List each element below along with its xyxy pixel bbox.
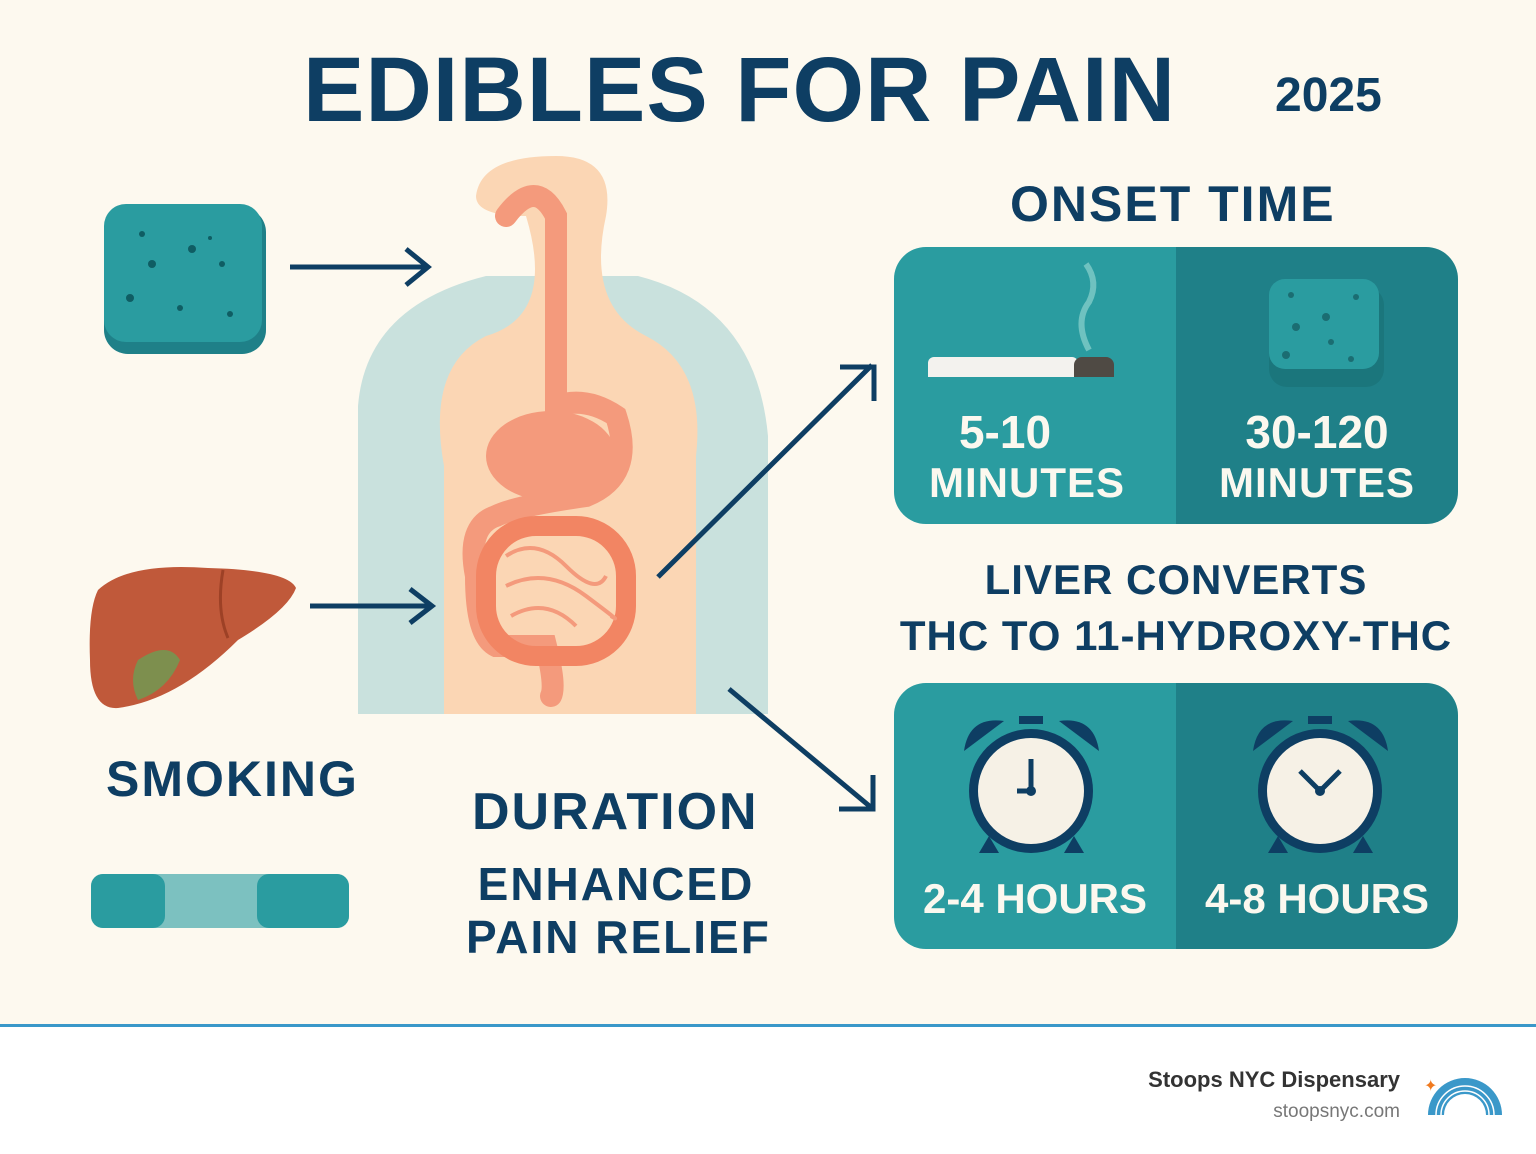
brand url: stoopsnyc.com — [1273, 1101, 1400, 1122]
edible duration — [1176, 683, 1458, 949]
text: liver converts: THC TO 11-HYDROXY-THC — [900, 612, 1452, 659]
logo: ✦ — [1424, 1078, 1437, 1095]
arrow: edible to body — [290, 247, 432, 287]
edible onset: 30-120 — [1245, 406, 1389, 458]
text: enhanced pain relief: PAIN RELIEF — [466, 911, 771, 963]
label: smoking: SMOKING — [106, 751, 359, 807]
smoking duration: 2-4 HOURS — [923, 875, 1147, 922]
edible duration: 4-8 HOURS — [1205, 875, 1429, 922]
arrow: body to onset — [656, 363, 876, 579]
year: 2025 — [1275, 69, 1382, 122]
heading: onset time: ONSET TIME — [1010, 176, 1336, 232]
text: liver converts: LIVER CONVERTS — [985, 556, 1367, 603]
edible onset: MINUTES — [1219, 459, 1415, 506]
edible onset — [1176, 247, 1458, 524]
arrow: liver to body — [310, 587, 436, 625]
label: duration: DURATION — [472, 783, 759, 841]
logo — [1424, 1078, 1502, 1115]
icon: edible square — [104, 204, 266, 354]
card: onset — [894, 247, 1458, 524]
icon: edible bar — [91, 874, 349, 928]
title: EDIBLES FOR PAIN — [303, 39, 1176, 141]
text: enhanced pain relief: ENHANCED — [478, 858, 754, 910]
text: liver converts — [900, 556, 1452, 659]
footer — [0, 1024, 1536, 1154]
text: enhanced pain relief — [466, 858, 771, 963]
arrow: body to duration — [728, 687, 876, 812]
smoking duration — [894, 683, 1176, 949]
smoking onset — [894, 247, 1176, 524]
smoking onset: 5-10 — [959, 406, 1051, 458]
brand name: Stoops NYC Dispensary — [1148, 1067, 1400, 1092]
icon: liver — [90, 567, 296, 708]
body figure — [358, 156, 768, 714]
card: duration — [894, 683, 1458, 949]
smoking onset: MINUTES — [929, 459, 1125, 506]
